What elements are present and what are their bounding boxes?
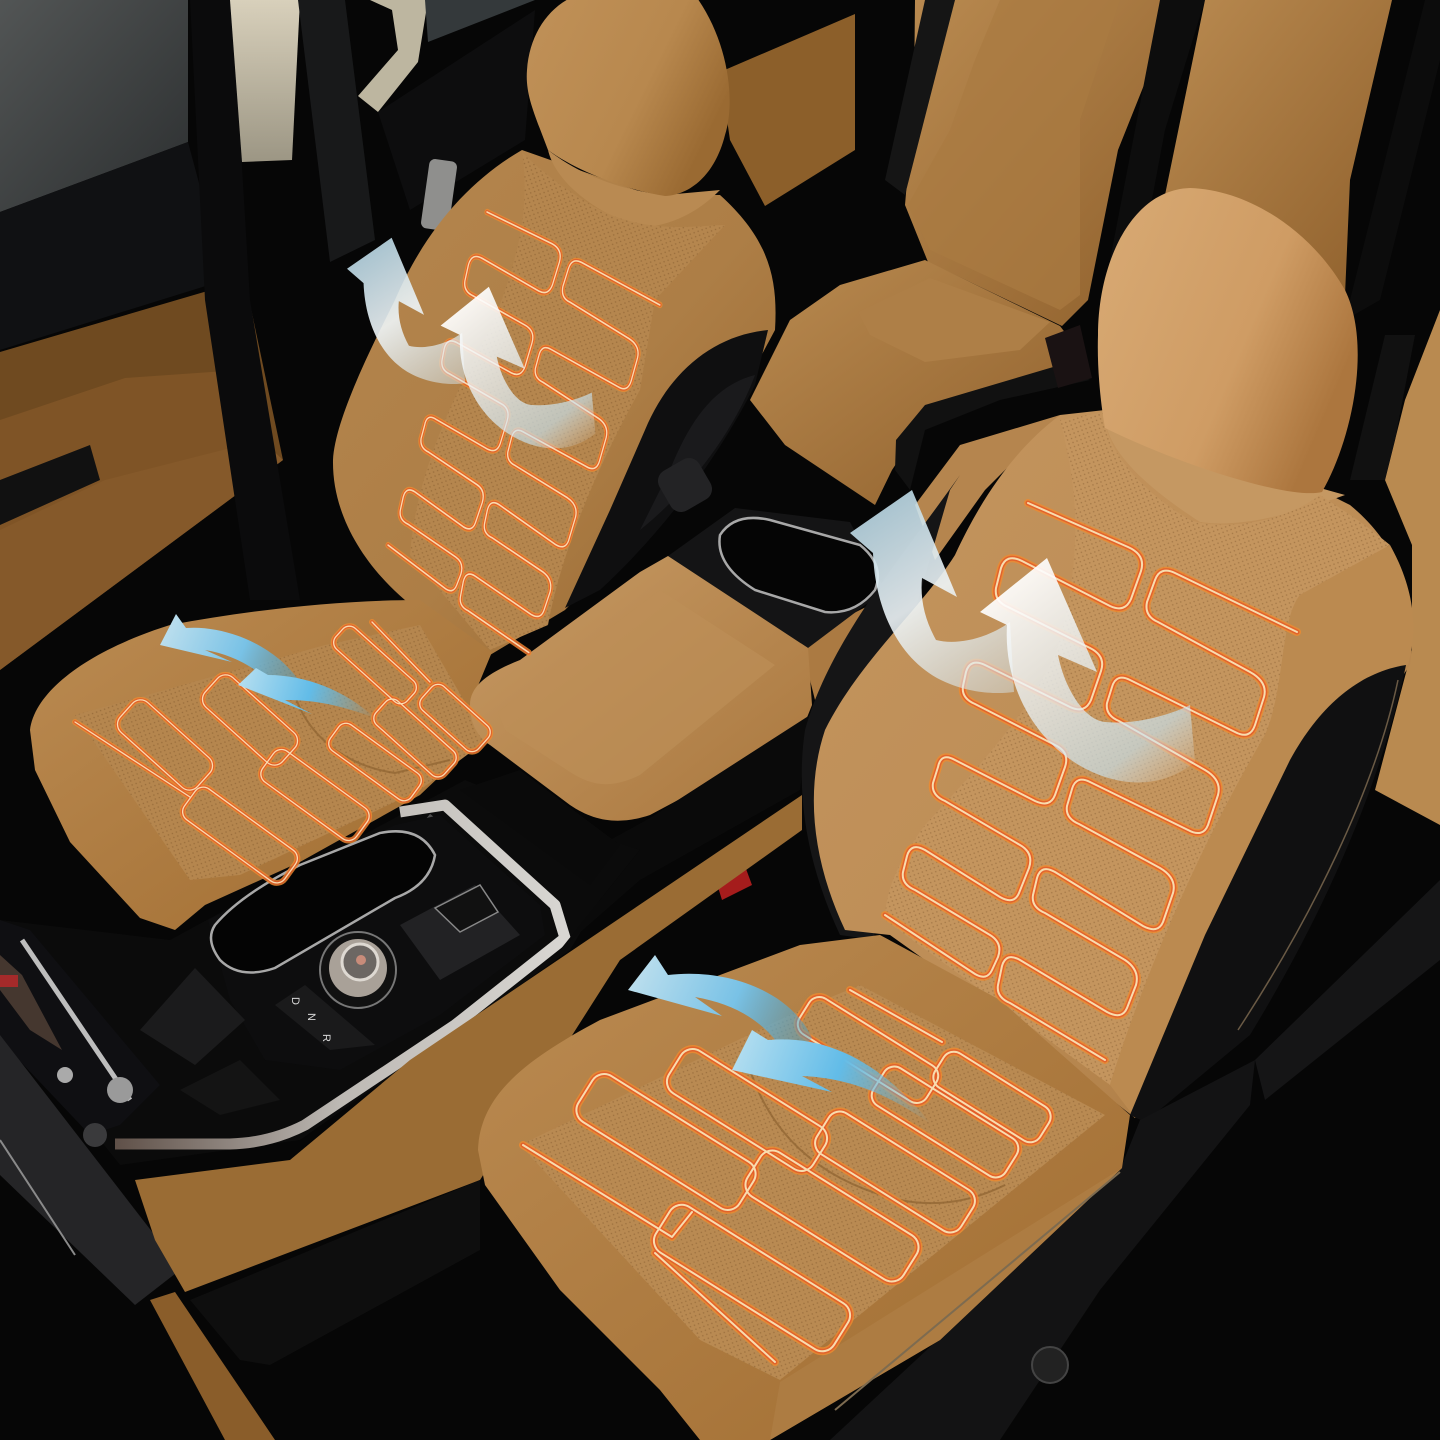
red hazard clip bbox=[712, 858, 752, 900]
armrest seam bbox=[498, 590, 775, 784]
coil red centre bbox=[75, 622, 494, 887]
rear cushion insert bbox=[858, 278, 1050, 362]
arrows: right cushion ventilation airflow bbox=[628, 955, 932, 1125]
drive label R: R bbox=[320, 1034, 332, 1042]
rear right belt bbox=[1345, 0, 1440, 320]
black side bolster bbox=[1130, 665, 1406, 1122]
drive label D: D bbox=[289, 997, 301, 1005]
panel: right front seat backrest bbox=[802, 410, 1413, 1122]
coil red centre bbox=[523, 990, 1055, 1362]
arrows: right backrest ventilation airflow bbox=[850, 490, 1195, 782]
drive label N: N bbox=[305, 1013, 317, 1021]
panel: left front seat backrest bbox=[333, 150, 776, 655]
coil core bbox=[386, 202, 662, 660]
tray lower pocket bbox=[180, 1060, 280, 1115]
drive selector plate bbox=[275, 985, 375, 1050]
door armrest bbox=[0, 370, 262, 590]
neck collar bbox=[548, 150, 720, 228]
panel: tan floor strip bbox=[135, 795, 802, 1292]
far right black bolster bbox=[1350, 335, 1415, 480]
arrow: air in right bbox=[980, 558, 1195, 782]
rotary selector knob bbox=[320, 932, 396, 1008]
rear black bolster bbox=[895, 365, 1090, 490]
rear left seat cushion bbox=[750, 260, 1086, 505]
seat belt bbox=[298, 0, 375, 262]
rear left seat back bbox=[905, 0, 1178, 326]
coil glow bbox=[75, 622, 494, 887]
seat controls bbox=[654, 454, 716, 516]
knob centre bbox=[356, 955, 366, 965]
panel: centre console bbox=[0, 715, 810, 1165]
perforation overlay bbox=[410, 152, 725, 650]
perforated centre bbox=[520, 985, 1105, 1380]
knob base bbox=[320, 932, 396, 1008]
bolster highlight stitching bbox=[1238, 680, 1398, 1030]
arrow: cushion air upper bbox=[160, 614, 300, 695]
arrow: air out left bbox=[347, 238, 465, 384]
rear right seat back bbox=[1165, 0, 1392, 295]
door window bbox=[0, 0, 188, 212]
arrow: cushion air lower bbox=[238, 668, 375, 718]
panel: dashboard climate controls bbox=[0, 920, 180, 1305]
coil red centre bbox=[386, 202, 662, 660]
coil glow bbox=[523, 990, 1055, 1362]
panel: left headrest bbox=[527, 0, 730, 196]
coil core bbox=[885, 503, 1297, 1060]
heater coils: left seat backrest bbox=[386, 202, 662, 660]
recess bbox=[460, 770, 620, 885]
rear tan behind front seat bbox=[915, 415, 1060, 560]
door tan panel bbox=[0, 280, 283, 670]
perforation overlay bbox=[75, 625, 487, 880]
coil core bbox=[75, 622, 494, 887]
rear window strip bbox=[425, 0, 535, 42]
wireless charger tray bbox=[140, 968, 245, 1065]
heater coils: left seat cushion bbox=[75, 622, 494, 887]
beige pillar trim bbox=[230, 0, 300, 162]
arrow: air out left bbox=[850, 490, 1014, 693]
door handle chrome bbox=[420, 158, 458, 231]
lower door perforated strip bbox=[0, 440, 283, 670]
panel: right side floor rails bbox=[1255, 880, 1440, 1100]
arrow: cushion air upper bbox=[628, 955, 812, 1062]
seat frame stitching bbox=[835, 1172, 1120, 1410]
coil red centre bbox=[885, 503, 1297, 1060]
far right seat edge bbox=[1375, 310, 1440, 825]
screen red accent bbox=[0, 975, 18, 987]
backrest outer bbox=[333, 150, 776, 655]
perforated centre panel bbox=[885, 412, 1390, 1085]
panel: left door and window bbox=[0, 0, 283, 670]
armrest lid bbox=[470, 556, 812, 821]
rear left perforated centre bbox=[908, 0, 1120, 310]
cushion contour bbox=[295, 695, 450, 773]
panel: lower floor black trim bbox=[190, 1180, 480, 1365]
perforated centre panel bbox=[410, 152, 725, 650]
chrome cup holder ring bbox=[719, 518, 878, 612]
arrow: air in right bbox=[441, 287, 595, 448]
backrest outer bbox=[814, 410, 1412, 1118]
coil glow bbox=[386, 202, 662, 660]
door pull black handle bbox=[0, 445, 100, 525]
front lip bbox=[770, 1168, 1122, 1440]
black side bolster bbox=[565, 330, 768, 608]
rear door tan bbox=[720, 14, 855, 206]
vent knob bbox=[83, 1123, 107, 1147]
coil core bbox=[523, 990, 1055, 1362]
seat side control bbox=[1032, 1347, 1068, 1383]
chrome slider top bbox=[22, 940, 130, 1100]
bolster inner shade bbox=[640, 375, 755, 530]
beige grab handle bbox=[358, 0, 428, 112]
door frame bbox=[190, 0, 300, 600]
knob ring bbox=[329, 939, 387, 997]
cushion outer bbox=[478, 935, 1130, 1440]
cup holder outline bbox=[211, 831, 435, 972]
panel: left seat cushion bbox=[30, 600, 492, 930]
panel: rear armrest console bbox=[470, 508, 885, 821]
perforated centre bbox=[75, 625, 487, 880]
black seat frame bbox=[830, 1060, 1255, 1440]
arrow: cushion air lower bbox=[732, 1030, 932, 1125]
perforation overlay bbox=[520, 985, 1105, 1380]
trim highlight bbox=[0, 1140, 75, 1255]
arrows: left cushion ventilation airflow bbox=[160, 614, 375, 718]
chrome knob bbox=[107, 1077, 133, 1103]
door side trim bbox=[378, 10, 535, 210]
button strip bbox=[425, 820, 528, 905]
heater coils: right seat backrest bbox=[885, 503, 1297, 1060]
knob cap bbox=[342, 944, 378, 980]
console body bbox=[0, 780, 640, 1165]
panel: right seat cushion bbox=[478, 935, 1255, 1440]
rear seat belt black bbox=[1110, 0, 1205, 290]
black left edge bbox=[802, 475, 960, 940]
gloss panel bbox=[208, 815, 545, 1070]
coil glow bbox=[885, 503, 1297, 1060]
right plain side panel bbox=[1110, 545, 1413, 1118]
dark wood trim bbox=[0, 1035, 180, 1305]
screen colour strip bbox=[0, 955, 62, 1050]
perforation overlay bbox=[885, 412, 1390, 1085]
cushion contour bbox=[750, 1070, 1005, 1203]
panel: right headrest bbox=[1098, 188, 1358, 493]
panel: lower left tan trim bbox=[150, 1292, 275, 1440]
rear left side belt bbox=[885, 0, 955, 195]
cushion shape bbox=[30, 600, 492, 930]
heater coils: right seat cushion bbox=[523, 990, 1055, 1362]
dark gloss panel bbox=[0, 920, 160, 1135]
arrows: left backrest ventilation airflow bbox=[347, 238, 595, 448]
seatbelt buckle bbox=[1045, 325, 1092, 388]
chrome trim bbox=[115, 805, 565, 1144]
tan base behind cup holders bbox=[800, 600, 880, 700]
neck collar bbox=[1104, 412, 1345, 523]
console rear black side bbox=[560, 715, 810, 950]
toggle switches bbox=[435, 885, 498, 932]
plate bbox=[275, 985, 375, 1050]
switch panel bbox=[400, 885, 520, 980]
black cup holder tray bbox=[668, 508, 885, 648]
small knob bbox=[57, 1067, 73, 1083]
upper door black trim bbox=[0, 142, 225, 350]
panel: B pillar and seat belt bbox=[190, 0, 855, 600]
panel: rear seats bbox=[750, 0, 1440, 825]
